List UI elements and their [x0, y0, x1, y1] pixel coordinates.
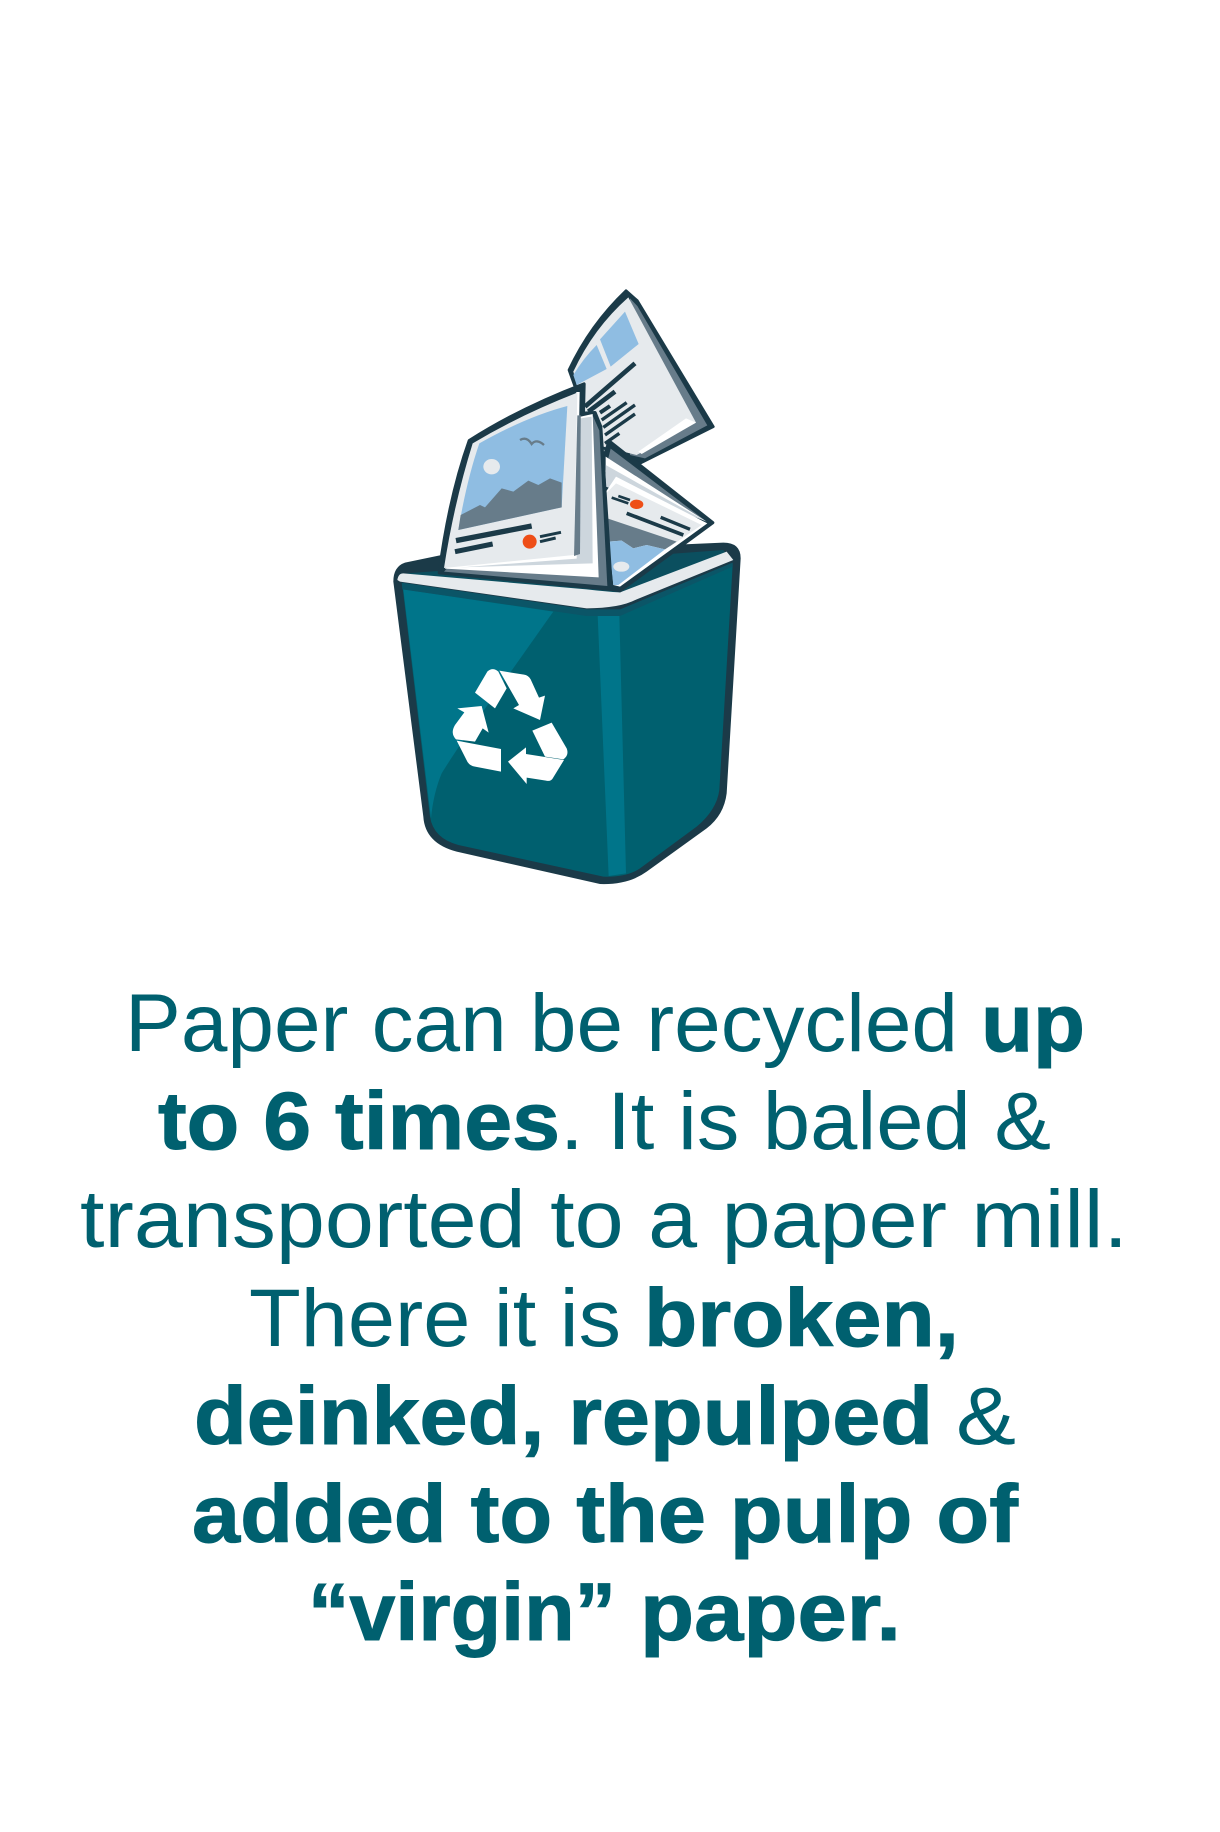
line 2 [158, 1076, 1051, 1167]
line 7 [308, 1567, 901, 1658]
text block: recycling description [80, 978, 1128, 1658]
line 3: transported to a paper mill. [80, 1174, 1128, 1265]
line 2: . It is baled & [560, 1076, 1051, 1167]
line 2: to 6 times [158, 1076, 560, 1167]
line 5: deinked, repulped [194, 1371, 933, 1462]
bin rim [397, 552, 733, 608]
line 5: & [956, 1371, 1016, 1462]
icon: recycling bin [393, 543, 741, 884]
icon: back paper sheet [569, 291, 713, 463]
icon: folded paper right [604, 441, 713, 591]
line 1: up [981, 978, 1085, 1069]
line 4: broken, [644, 1273, 959, 1364]
illustration: recycling bin with papers [393, 291, 741, 884]
line 4 [249, 1273, 959, 1364]
line 4: There it is [249, 1273, 621, 1364]
line 7: paper. [640, 1567, 901, 1658]
line 7: “virgin” [308, 1567, 616, 1658]
line 6: added to the pulp of [192, 1469, 1019, 1560]
icon: recycle symbol [453, 669, 567, 784]
icon: front magazine page [439, 384, 611, 589]
line 1: Paper can be recycled [125, 978, 958, 1069]
